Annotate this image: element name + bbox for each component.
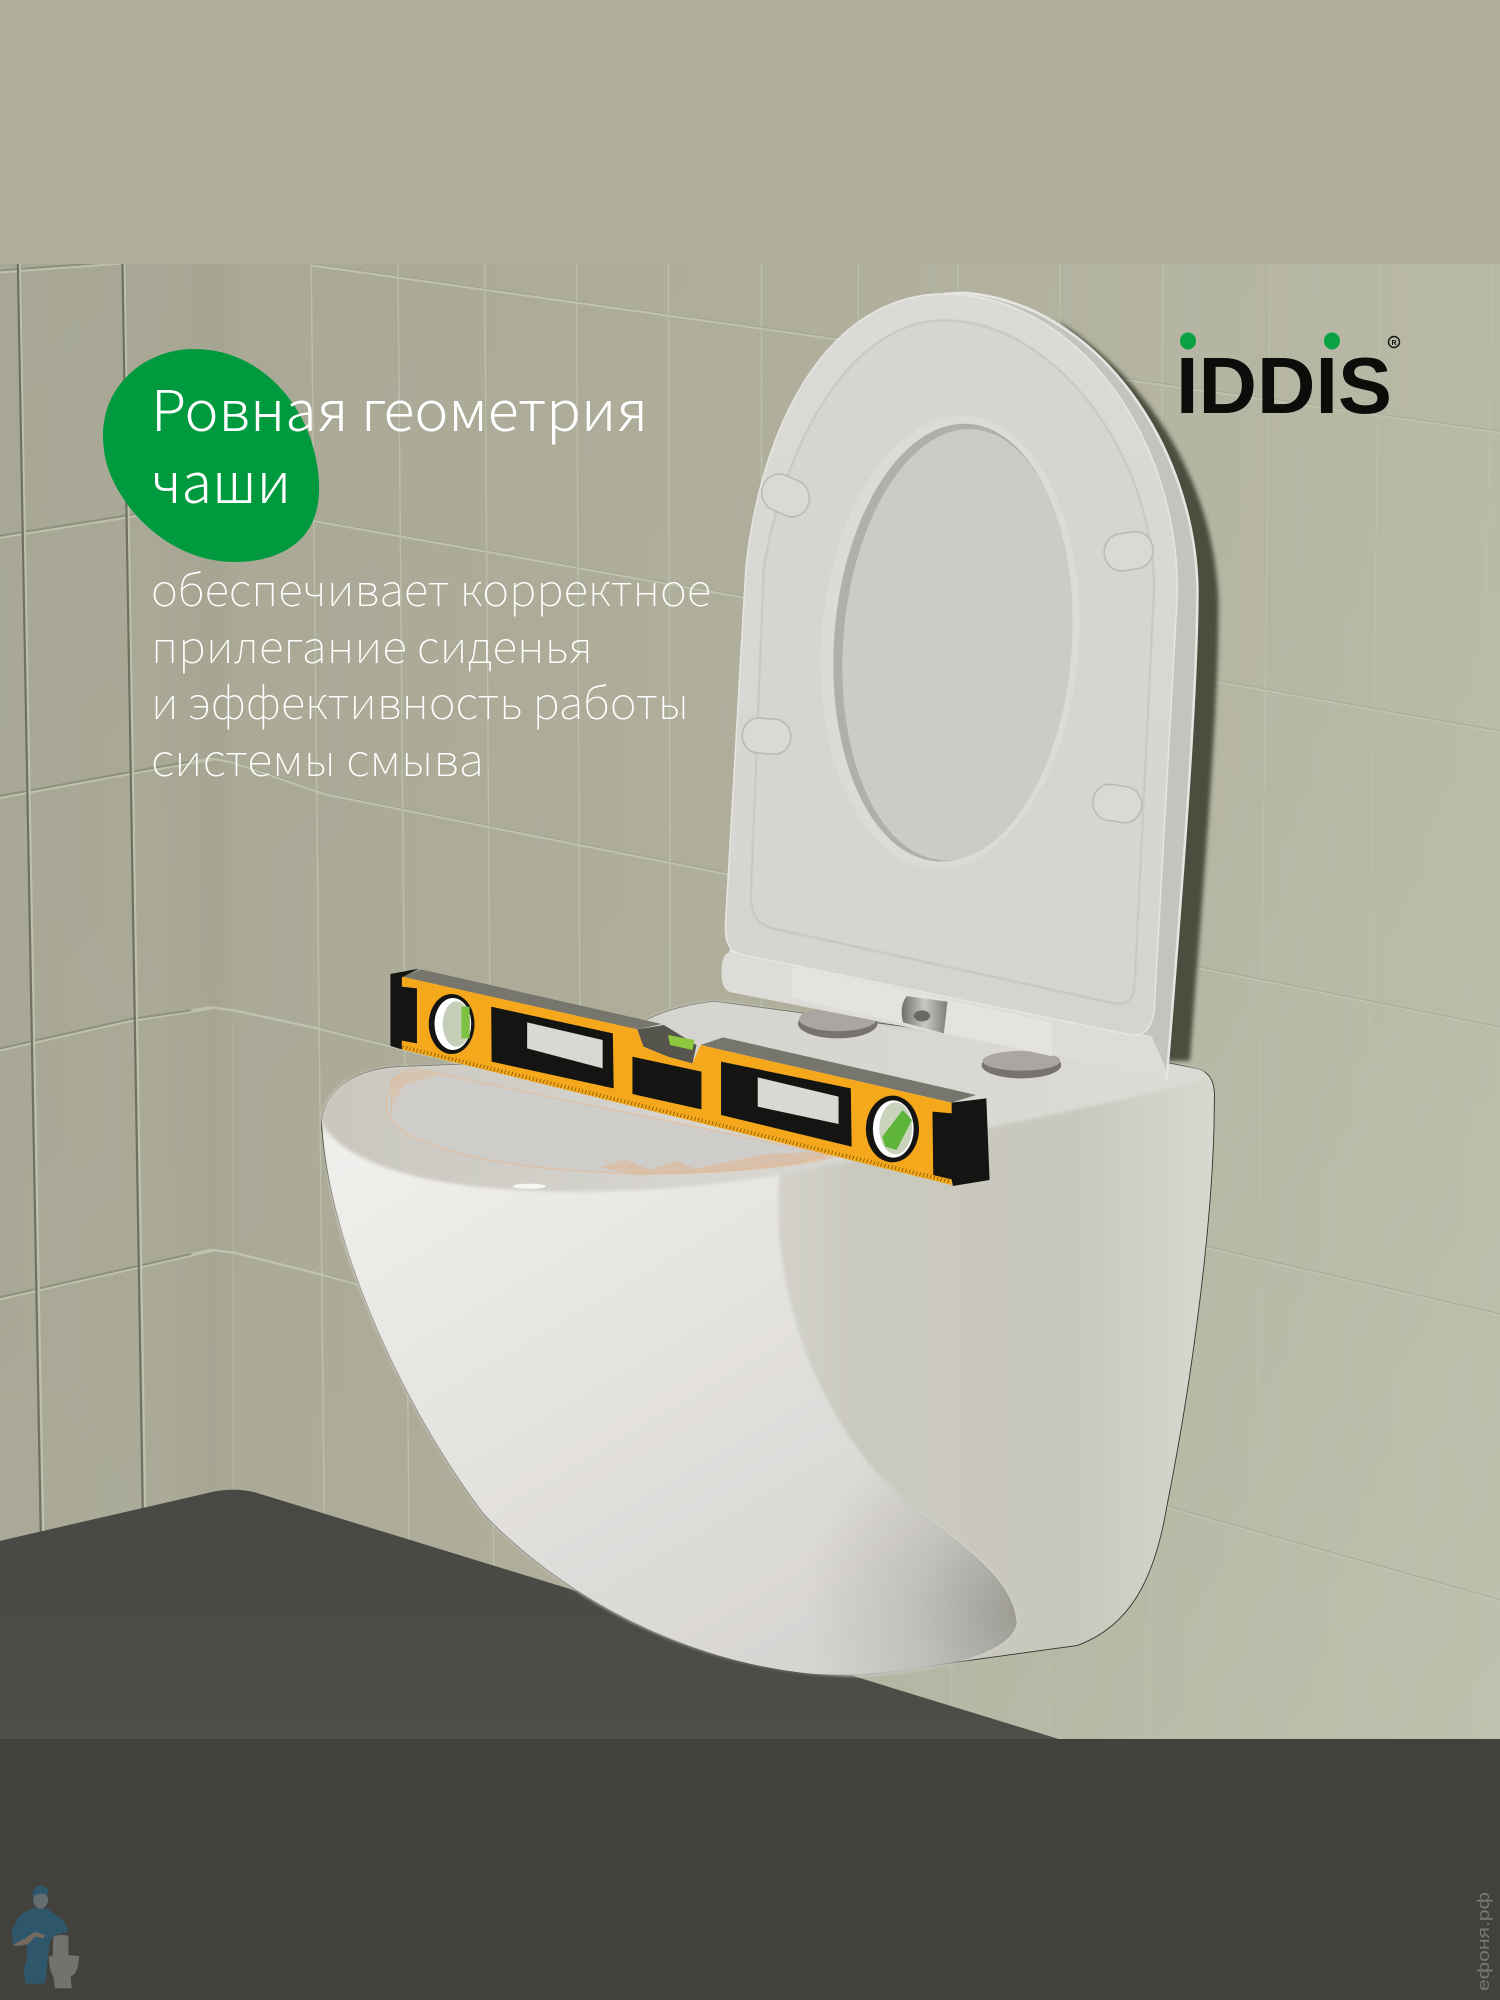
plumber head [33, 1891, 48, 1909]
right vial [866, 1096, 919, 1162]
floor [0, 1490, 1061, 1740]
plumber wrench [13, 1932, 45, 1946]
description text: и эффективность работы [151, 668, 689, 732]
bottom band [0, 1739, 1500, 2000]
description text [151, 555, 711, 789]
plumber toilet [49, 1935, 79, 1988]
seat opening [804, 404, 1096, 881]
bowl front shell [324, 1133, 1017, 1676]
left end cap [390, 969, 419, 1049]
plumber watermark icon [12, 1886, 79, 1988]
spirit level [390, 969, 990, 1186]
right end cap [932, 1098, 990, 1186]
hinge bolts [798, 1007, 1061, 1078]
level top faces [402, 969, 662, 1029]
plumber body [12, 1908, 69, 1984]
wall-hung toilet bowl [321, 1001, 1215, 1676]
center label [632, 1057, 701, 1109]
level yellow body [402, 977, 952, 1185]
heading: чаши [151, 439, 291, 520]
description text: прилегание сиденья [151, 612, 593, 676]
green blob behind heading [103, 349, 319, 562]
hinge clip [902, 996, 947, 1033]
left vial [429, 994, 474, 1054]
rear lid [731, 293, 1197, 1077]
ruler ticks [403, 1047, 950, 1182]
bowl tip shading [842, 1490, 1016, 1675]
IDDIS logo: IDDIS [1176, 341, 1392, 430]
hinge bar [721, 952, 1167, 1077]
description text: системы смыва [151, 725, 484, 789]
tiled wall [0, 261, 1500, 1739]
photo scene [0, 261, 1500, 1740]
site watermark: ефоня.рф [1474, 1892, 1493, 1991]
heading [151, 367, 648, 520]
rim highlight [513, 1184, 546, 1189]
seat recess [751, 320, 1154, 1004]
seat shadow on wall [1057, 320, 1218, 1061]
description text: обеспечивает корректное [151, 555, 711, 619]
left handle [491, 1007, 614, 1088]
rim top surface [321, 1001, 1204, 1192]
seat plate [725, 294, 1177, 1035]
left wall grout [0, 263, 213, 1298]
top band [0, 0, 1500, 264]
IDDIS logo: R [1391, 340, 1397, 347]
toilet seat lid [721, 293, 1197, 1077]
seat bumpers [741, 468, 1155, 825]
bowl opening [386, 1069, 829, 1173]
heading: Ровная геометрия [151, 367, 648, 448]
center notch [637, 1025, 697, 1063]
right handle [721, 1062, 852, 1147]
